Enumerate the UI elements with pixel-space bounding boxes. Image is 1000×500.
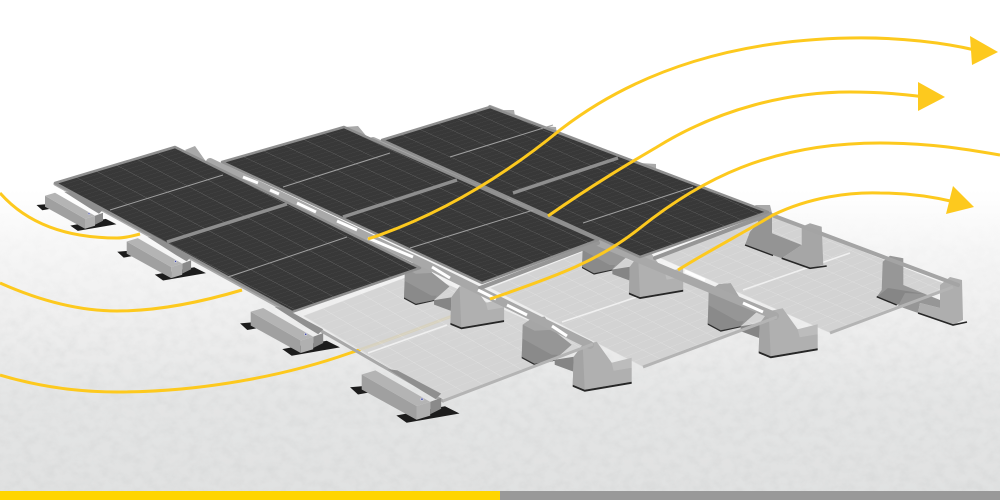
footprint panel: column 3 xyxy=(660,215,953,333)
footprint panel: column 2 xyxy=(490,245,777,367)
wind line: left segment 1 xyxy=(0,193,140,238)
module centre line lower xyxy=(228,237,347,277)
concrete ballast block 3 xyxy=(240,307,340,356)
wind line 1 with arrow xyxy=(368,36,998,239)
solar array column 1 xyxy=(55,147,420,312)
panel divider xyxy=(343,180,457,217)
ground panel footprints xyxy=(303,215,953,400)
solar array column 2 xyxy=(222,127,598,283)
support frames: rear row, column 1 xyxy=(404,261,504,329)
rails between columns xyxy=(55,107,958,401)
wind line 3 xyxy=(490,143,1000,299)
support frames: front row, column 3 xyxy=(877,256,967,325)
wind line 4 with arrow xyxy=(678,186,974,270)
module centre line lower xyxy=(583,187,693,223)
module centre line upper xyxy=(110,175,223,210)
support frames: rear row, column 3 xyxy=(745,205,827,268)
support frames: front row, column 1 xyxy=(522,317,632,392)
wind line 2 with arrow xyxy=(548,82,945,216)
concrete ballast block 1 xyxy=(36,192,116,231)
panel divider xyxy=(513,158,618,193)
footer bar: yellow xyxy=(0,491,500,500)
footer bar: grey xyxy=(500,491,1000,500)
solar array column 3 xyxy=(382,107,768,257)
support frames: rear row, column 2 xyxy=(582,230,683,299)
front frame edges xyxy=(443,287,953,401)
module centre line upper xyxy=(450,125,553,157)
footprint panel: column 1 xyxy=(303,272,587,400)
wind line: left segment 2 xyxy=(0,283,242,311)
small rear brackets xyxy=(185,110,772,213)
panel divider xyxy=(167,204,287,242)
wind line: left segment 3 passing under the panel xyxy=(0,315,455,392)
concrete background xyxy=(0,231,1000,491)
module centre line upper xyxy=(283,153,390,187)
concrete ballast block 4 xyxy=(350,369,460,423)
rail white slits xyxy=(243,177,763,336)
support frames: front row, column 2 xyxy=(708,283,818,358)
concrete ballast block 2 xyxy=(117,237,206,281)
module centre line lower xyxy=(410,208,540,248)
